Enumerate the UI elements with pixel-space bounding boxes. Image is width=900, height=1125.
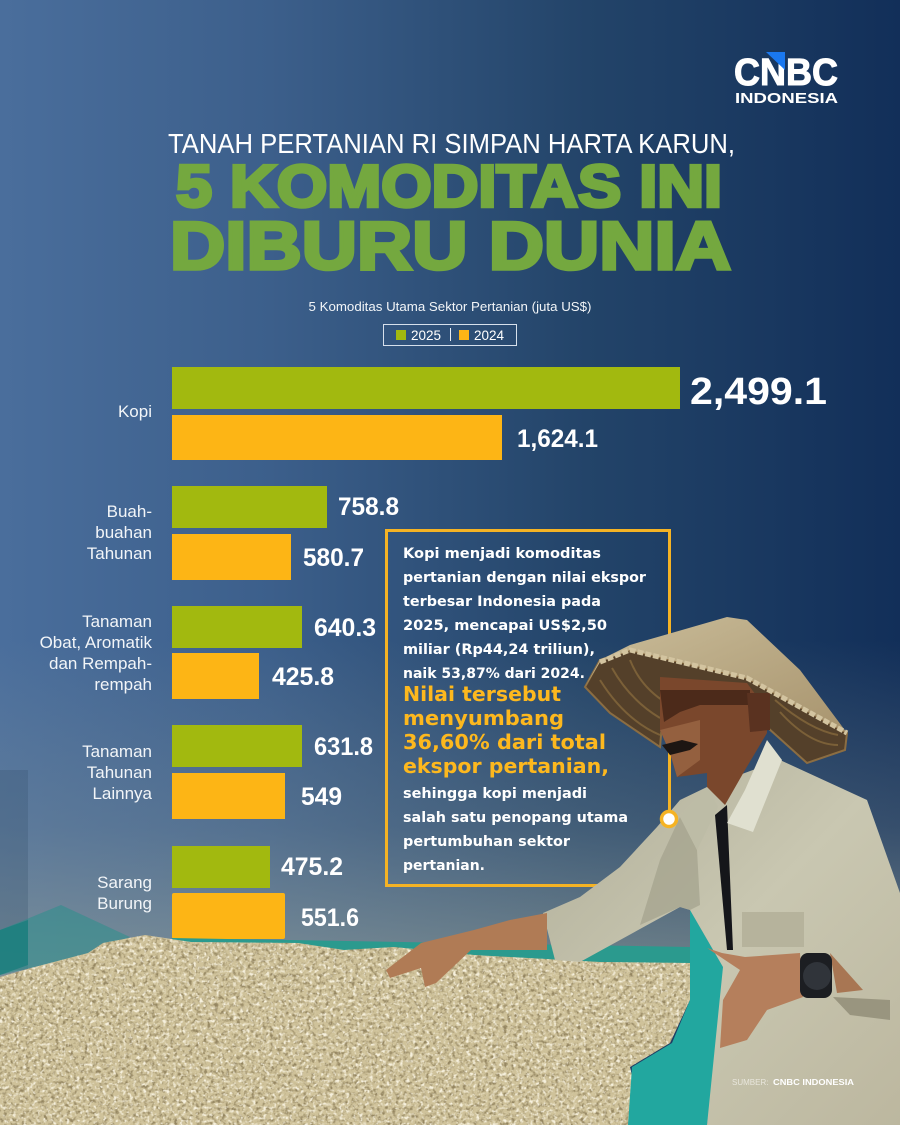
callout closing text: pertanian. <box>403 858 485 874</box>
farmer: hat fringe <box>600 650 847 733</box>
farmer: sleeve shadow <box>640 817 700 925</box>
callout white text: Kopi menjadi komoditas <box>403 546 601 562</box>
row: Kopi: 2,499.1 <box>690 371 827 413</box>
source credit <box>732 1077 854 1087</box>
callout connector dot <box>662 812 676 826</box>
row: Kopi: 1,624.1 <box>517 425 598 453</box>
farmer: wristwatch <box>800 953 832 998</box>
row: Tanaman Obat, Aromatik dan Rempah-rempah: 640.3 <box>314 614 376 642</box>
row: Sarang Burung: 551.6 <box>301 904 359 932</box>
callout white text: naik 53,87% dari 2024. <box>403 666 585 682</box>
callout highlighted text <box>403 682 609 778</box>
row: Sarang Burung: 475.2 <box>281 853 343 881</box>
callout closing text <box>403 786 628 874</box>
photo: teal drying net behind beans <box>0 905 690 975</box>
legend: 2024 <box>474 328 505 343</box>
farmer: shirt pocket <box>742 912 804 947</box>
row: Tanaman Obat, Aromatik dan Rempah-rempah: Tanaman <box>82 612 152 631</box>
callout white text <box>403 546 647 682</box>
row: Tanaman Tahunan Lainnya: Tanaman <box>82 742 152 761</box>
farmer: forearm <box>830 953 863 993</box>
callout white text: miliar (Rp44,24 triliun), <box>403 642 595 658</box>
row: Tanaman Obat, Aromatik dan Rempah-rempah: 425.8 <box>272 663 334 691</box>
callout white text: terbesar Indonesia pada <box>403 594 601 610</box>
title: TANAH PERTANIAN RI SIMPAN HARTA KARUN, <box>168 128 735 159</box>
callout highlighted text: Nilai tersebut <box>403 682 561 706</box>
row: Tanaman Obat, Aromatik dan Rempah-rempah: Obat, Aromatik <box>40 633 152 652</box>
callout closing text: pertumbuhan sektor <box>403 834 571 850</box>
photo: farmer <box>386 617 900 1125</box>
farmer: right hand <box>707 948 803 1048</box>
callout closing text: sehingga kopi menjadi <box>403 786 587 802</box>
callout highlighted text: 36,60% dari total <box>403 730 606 754</box>
legend: 2025 <box>411 328 441 343</box>
callout box <box>386 530 670 886</box>
farmer: hat crown <box>585 617 847 733</box>
title: DIBURU DUNIA <box>170 208 731 284</box>
title: 5 KOMODITAS INI <box>176 154 722 220</box>
row: Tanaman Obat, Aromatik dan Rempah-rempah: dan Rempah- <box>49 654 152 673</box>
title <box>168 128 735 284</box>
row: Tanaman Obat, Aromatik dan Rempah-rempah: rempah <box>94 675 152 694</box>
farmer: shirt opening <box>715 805 733 950</box>
photo: teal net fold <box>628 910 723 1125</box>
callout highlighted text: menyumbang <box>403 706 564 730</box>
row: Tanaman Obat, Aromatik dan Rempah-rempah <box>40 606 376 699</box>
bar chart <box>40 367 827 939</box>
callout closing text: salah satu penopang utama <box>403 810 628 826</box>
chart subtitle: 5 Komoditas Utama Sektor Pertanian (juta US$) <box>308 299 592 314</box>
row: Buah-buahan Tahunan: buahan <box>95 523 152 542</box>
logo: CNBC Indonesia: INDONESIA <box>735 90 838 107</box>
row: Sarang Burung: Sarang <box>97 873 152 892</box>
row: Buah-buahan Tahunan <box>87 486 399 580</box>
row: Kopi <box>118 367 827 460</box>
row: Sarang Burung: Burung <box>97 894 152 913</box>
farmer: shirt collar <box>727 740 782 832</box>
row: Buah-buahan Tahunan: 580.7 <box>303 544 364 572</box>
row: Tanaman Tahunan Lainnya: 549 <box>301 783 342 811</box>
row: Tanaman Tahunan Lainnya: Lainnya <box>92 784 153 803</box>
row: Buah-buahan Tahunan: 758.8 <box>338 493 399 521</box>
farmer: neck and face <box>660 677 767 805</box>
photo: coffee beans pile <box>0 930 700 1125</box>
row: Sarang Burung <box>97 846 359 939</box>
source credit: CNBC INDONESIA <box>773 1077 854 1087</box>
callout white text: 2025, mencapai US$2,50 <box>403 618 607 634</box>
farmer: left forearm and hand <box>386 913 547 987</box>
row: Buah-buahan Tahunan: Buah- <box>107 502 152 521</box>
farmer: hat underside <box>585 650 847 763</box>
row: Tanaman Tahunan Lainnya: 631.8 <box>314 733 373 761</box>
farmer: sleeve cuff <box>833 997 890 1020</box>
source credit: SUMBER: <box>732 1078 768 1087</box>
callout highlighted text: ekspor pertanian, <box>403 754 609 778</box>
farmer: moustache <box>662 740 698 755</box>
row: Tanaman Tahunan Lainnya <box>82 725 373 819</box>
row: Kopi: Kopi <box>118 402 152 421</box>
row: Tanaman Tahunan Lainnya: Tahunan <box>87 763 152 782</box>
farmer: shirt body <box>543 760 900 1125</box>
legend <box>384 324 516 346</box>
callout white text: pertanian dengan nilai ekspor <box>403 570 647 586</box>
logo: CNBC Indonesia: CNBC <box>734 52 838 94</box>
row: Buah-buahan Tahunan: Tahunan <box>87 544 152 563</box>
